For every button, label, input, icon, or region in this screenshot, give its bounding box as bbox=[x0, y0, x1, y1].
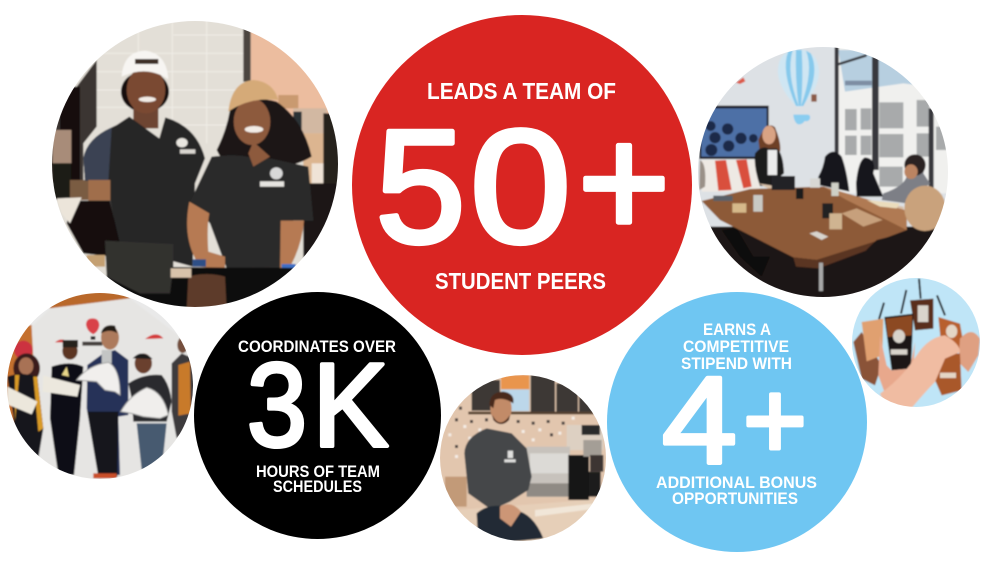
stat number: + bbox=[743, 359, 807, 482]
stat: coordinates over 3K hours of team schedules bbox=[194, 292, 441, 539]
photo: two team members behind the counter bbox=[52, 21, 338, 307]
person 2 bbox=[62, 342, 78, 360]
stat label top line three: STIPEND WITH bbox=[681, 354, 792, 373]
hand left bbox=[853, 332, 882, 385]
stat label top: LEADS A TEAM OF bbox=[427, 78, 616, 104]
tv bbox=[699, 106, 769, 159]
stat number: + bbox=[578, 95, 670, 270]
counter bbox=[67, 201, 120, 257]
stat label top line two: COMPETITIVE bbox=[683, 337, 789, 356]
right person bbox=[217, 99, 312, 168]
man bbox=[464, 428, 532, 510]
table bbox=[690, 227, 960, 300]
cup 3 bbox=[910, 299, 933, 330]
cup 5 bbox=[934, 352, 962, 395]
stat label top: EARNS A bbox=[703, 320, 771, 339]
photo: hands raising iced coffee cups bbox=[852, 278, 980, 407]
menu boards bbox=[435, 370, 610, 374]
photo: group with Bowie University signs bbox=[7, 293, 193, 479]
seated people bbox=[818, 152, 849, 192]
stat label top: COORDINATES OVER bbox=[238, 337, 396, 356]
stat number: 5 bbox=[376, 97, 466, 277]
stat number: 4 bbox=[662, 352, 737, 490]
stat label bottom line two: SCHEDULES bbox=[273, 477, 362, 496]
stat label bottom: STUDENT PEERS bbox=[435, 268, 606, 294]
presenter bbox=[758, 125, 780, 153]
stat number bbox=[376, 95, 670, 277]
hands bbox=[878, 335, 915, 394]
stat: earns a competitive stipend with 4+ additional bonus opportunities bbox=[607, 292, 867, 552]
person 4 bbox=[135, 353, 152, 373]
stat label bottom line two: OPPORTUNITIES bbox=[672, 489, 798, 508]
wall balloon bbox=[778, 49, 819, 107]
cup 2 bbox=[884, 314, 913, 370]
stat label bottom: HOURS OF TEAM bbox=[256, 462, 380, 481]
espresso machine bbox=[527, 447, 570, 497]
striped booth bbox=[702, 160, 760, 192]
stat number: K bbox=[312, 339, 388, 472]
table items bbox=[772, 176, 795, 190]
stat: leads a team of 50+ student peers bbox=[352, 15, 692, 355]
photo: barista seated at cafe counter bbox=[440, 375, 606, 541]
left person bbox=[121, 71, 169, 112]
photo: team meeting around conference table bbox=[698, 47, 948, 297]
cup 1 bbox=[862, 319, 883, 361]
stat number bbox=[247, 339, 388, 472]
person 3 bbox=[101, 326, 119, 350]
cup 4 bbox=[938, 317, 965, 352]
person 1 bbox=[13, 353, 40, 383]
front arm bbox=[880, 335, 960, 412]
stat number bbox=[662, 352, 807, 490]
stat number: 3 bbox=[247, 339, 307, 472]
person 5 bbox=[172, 353, 197, 438]
stat label bottom: ADDITIONAL BONUS bbox=[656, 473, 817, 492]
counter bbox=[455, 498, 610, 545]
stat number: 0 bbox=[470, 97, 571, 277]
